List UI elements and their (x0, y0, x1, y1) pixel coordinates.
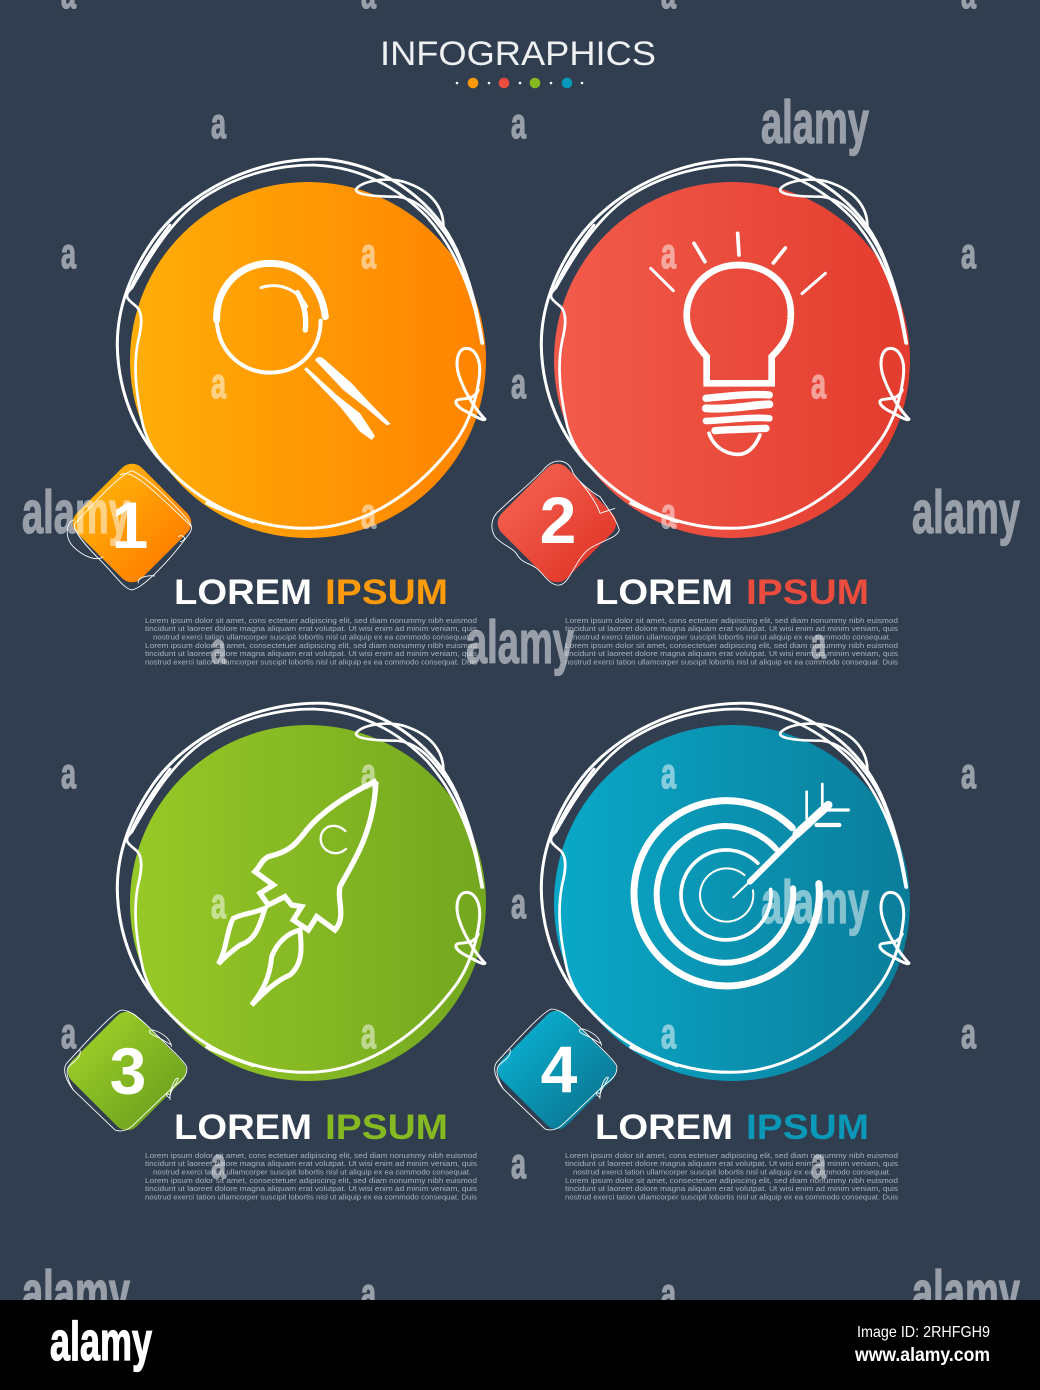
watermark pattern: a (661, 490, 677, 538)
panel 3 heading: LOREM (174, 1108, 312, 1147)
image id: Image ID: 2RHFGH9 (857, 1324, 990, 1341)
panel 4 heading: IPSUM (746, 1108, 869, 1147)
watermark pattern: a (511, 880, 527, 928)
icon: light bulb (651, 233, 825, 454)
watermark pattern: a (361, 1010, 377, 1058)
website: www.alamy.com (854, 1345, 990, 1366)
panel 3 circle (130, 725, 486, 1081)
panel 1 heading: LOREM (174, 573, 312, 612)
panel 2: idea (492, 159, 910, 666)
panel 1 body text: Lorem ipsum dolor sit amet, cons ectetuer adipiscing elit, sed diam nonummy nibh euismod (145, 616, 477, 625)
panel 2 body text: Lorem ipsum dolor sit amet, cons ectetuer adipiscing elit, sed diam nonummy nibh euismod (565, 616, 898, 625)
panel 4 body text: tincidunt ut laoreet dolore magna aliquam erat volutpat. Ut wisi enim ad minim veniam, quis (565, 1159, 898, 1168)
watermark pattern: alamy (761, 869, 869, 936)
panel 3 body text: Lorem ipsum dolor sit amet, cons ectetuer adipiscing elit, sed diam nonummy nibh euismod (145, 1151, 477, 1160)
panel 1 body text: tincidunt ut laoreet dolore magna aliquam erat volutpat. Ut wisi enim ad minim veniam, quis (145, 649, 477, 658)
watermark pattern: alamy (22, 1259, 130, 1326)
watermark pattern: a (211, 880, 227, 928)
panel 4 body text: Lorem ipsum dolor sit amet, consectetuer adipiscing elit, sed diam nonummy nibh euismod (565, 1176, 898, 1185)
panel 3 scribble ring (117, 703, 485, 1072)
panel 1 circle (130, 182, 486, 538)
watermark pattern: a (211, 625, 227, 673)
watermark pattern: a (961, 1010, 977, 1058)
panel 2 heading (595, 573, 869, 612)
panel 4 body text: Lorem ipsum dolor sit amet, cons ectetuer adipiscing elit, sed diam nonummy nibh euismod (565, 1151, 898, 1160)
number badge 4 (492, 1005, 622, 1135)
panel 1 body text (145, 616, 477, 666)
watermark pattern: a (61, 230, 77, 278)
watermark pattern: a (661, 230, 677, 278)
watermark pattern: a (961, 750, 977, 798)
title dots (456, 78, 583, 88)
watermark pattern: a (361, 750, 377, 798)
panel 4 body text: nostrud exerci tation ullamcorper suscipit lobortis nisl ut aliquip ex ea commodo consequat. Duis (565, 1192, 898, 1202)
panel 4 scribble ring (541, 703, 909, 1072)
panel 1 scribble ring (117, 159, 485, 528)
watermark pattern: a (811, 1140, 827, 1188)
watermark pattern: a (661, 1010, 677, 1058)
number badge 1 (67, 458, 197, 590)
watermark pattern: alamy (466, 609, 574, 676)
watermark pattern: a (511, 360, 527, 408)
footer logo: alamy (50, 1310, 152, 1372)
watermark pattern: a (211, 1140, 227, 1188)
panel 3 body text: nostrud exerci tation ullamcorper suscipit lobortis nisl ut aliquip ex ea commodo consequat. (153, 1168, 471, 1176)
panel 1 body text: tincidunt ut laoreet dolore magna aliquam erat volutpat. Ut wisi enim ad minim veniam, quis (145, 624, 477, 633)
panel 2 body text: nostrud exerci tation ullamcorper suscipit lobortis nisl ut aliquip ex ea commodo consequat. (573, 632, 891, 642)
panel 2 heading: IPSUM (746, 573, 869, 612)
number badge 1: 1 (112, 488, 148, 562)
panel 4: target (492, 703, 910, 1202)
panel 1: search (67, 159, 486, 666)
number badge 2: 2 (540, 483, 576, 557)
panel 2 scribble ring (541, 159, 909, 528)
watermark pattern: a (361, 1270, 377, 1318)
icon: rocket (218, 781, 377, 1005)
watermark pattern: a (661, 1270, 677, 1318)
panel 4 heading: LOREM (595, 1108, 733, 1147)
number badge 3 (62, 1006, 192, 1136)
panel 1 body text: Lorem ipsum dolor sit amet, consectetuer adipiscing elit, sed diam nonummy nibh euismod (145, 641, 477, 650)
watermark pattern: a (511, 100, 527, 148)
panel 3 body text: nostrud exerci tation ullamcorper suscipit lobortis nisl ut aliquip ex ea commodo consequat. Duis (145, 1192, 477, 1202)
panel 3 heading (174, 1108, 448, 1147)
panel 2 body text: nostrud exerci tation ullamcorper suscipit lobortis nisl ut aliquip ex ea commodo consequat. Duis (565, 658, 898, 666)
icon: magnifying glass (217, 263, 391, 440)
panel 2 body text: tincidunt ut laoreet dolore magna aliquam erat volutpat. Ut wisi enim ad minim veniam, quis (565, 649, 898, 658)
watermark pattern: a (211, 360, 227, 408)
panel 2 heading: LOREM (595, 573, 733, 612)
watermark pattern: a (811, 620, 827, 668)
number badge 4: 4 (541, 1032, 578, 1106)
watermark pattern: a (961, 230, 977, 278)
panel 3: launch (62, 703, 486, 1202)
footer bar (0, 1300, 1040, 1390)
watermark pattern: a (361, 490, 377, 538)
panel 3 heading: IPSUM (325, 1108, 448, 1147)
watermark pattern: a (511, 1140, 527, 1188)
watermark pattern: a (661, 750, 677, 798)
panel 2 body text: Lorem ipsum dolor sit amet, consectetuer adipiscing elit, sed diam nonummy nibh euismod (565, 641, 898, 650)
watermark pattern: a (211, 100, 227, 148)
title: INFOGRAPHICS (380, 35, 656, 73)
watermark pattern: a (61, 750, 77, 798)
panel 4 circle (554, 725, 910, 1081)
panel 2 body text (565, 616, 898, 666)
panel 1 heading (174, 573, 448, 612)
panel 4 body text: nostrud exerci tation ullamcorper suscipit lobortis nisl ut aliquip ex ea commodo consequat. (573, 1168, 891, 1176)
panel 1 heading: IPSUM (325, 573, 448, 612)
panel 3 body text: Lorem ipsum dolor sit amet, consectetuer adipiscing elit, sed diam nonummy nibh euismod (145, 1176, 477, 1185)
watermark pattern: a (61, 1010, 77, 1058)
watermark pattern: alamy (22, 479, 130, 546)
panel 3 body text (145, 1151, 477, 1202)
panel 2 body text: tincidunt ut laoreet dolore magna aliquam erat volutpat. Ut wisi enim ad minim veniam, quis (565, 624, 898, 633)
number badge 2 (492, 458, 622, 588)
watermark pattern: a (811, 360, 827, 408)
panel 3 body text: tincidunt ut laoreet dolore magna aliquam erat volutpat. Ut wisi enim ad minim veniam, quis (145, 1184, 477, 1193)
panel 1 body text: nostrud exerci tation ullamcorper suscipit lobortis nisl ut aliquip ex ea commodo consequat. Duis (145, 658, 477, 666)
panel 4 body text: tincidunt ut laoreet dolore magna aliquam erat volutpat. Ut wisi enim ad minim veniam, quis (565, 1184, 898, 1193)
panel 4 body text (565, 1151, 898, 1202)
panel 2 circle (554, 182, 910, 538)
watermark pattern: a (361, 230, 377, 278)
panel 4 heading (595, 1108, 869, 1147)
icon: target with arrow (634, 784, 848, 986)
watermark pattern: alamy (761, 89, 869, 156)
number badge 3: 3 (110, 1034, 146, 1108)
panel 1 body text: nostrud exerci tation ullamcorper suscipit lobortis nisl ut aliquip ex ea commodo consequat. (153, 632, 471, 642)
panel 3 body text: tincidunt ut laoreet dolore magna aliquam erat volutpat. Ut wisi enim ad minim veniam, quis (145, 1159, 477, 1168)
